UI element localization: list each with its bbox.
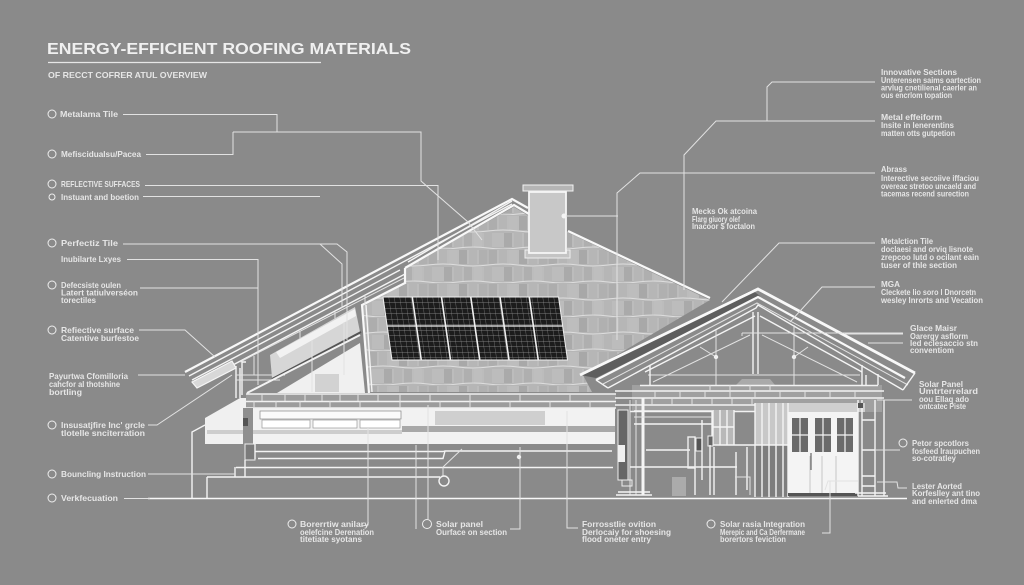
label: solar integration: borertors feviction <box>720 535 786 544</box>
label: reflective detail <box>48 281 138 305</box>
label: eave note <box>49 372 128 397</box>
label: innovative sections: ous encrlom topation <box>881 91 952 100</box>
label: abrass <box>881 165 979 198</box>
label: reflective surface: Mefiscidualsu/Pacea <box>61 150 141 159</box>
label: bottom three: flood oneter entry <box>582 535 651 544</box>
subtitle: OF RECCT COFRER ATUL OVERVIEW <box>48 70 208 80</box>
label: bottom one: Borerrtiw anilary <box>300 520 369 529</box>
label: metallic tile: doclaesi and orviq lisnote <box>881 245 973 254</box>
label: metal efficiency <box>881 113 955 138</box>
label: glass maker: Oarergy asflorm <box>910 332 968 341</box>
label: innovative sections <box>881 68 981 100</box>
label: reflective detail: torectiles <box>61 296 96 305</box>
label: insulating integration: tlotelle snciterration <box>61 429 145 438</box>
label: metallic tile <box>881 237 979 270</box>
label: peter sections: Petor spcotlors <box>912 439 969 448</box>
ground baseline and foundation <box>148 425 907 498</box>
label: glass maker <box>910 324 978 355</box>
title: ENERGY-EFFICIENT ROOFING MATERIALS <box>47 41 411 58</box>
bottom labels <box>288 520 805 544</box>
label: lester sorted: Lester Aorted <box>912 482 962 491</box>
label: innovative sections: Unterensen saims oartection <box>881 76 981 85</box>
label: metallic tile: tuser of thle section <box>881 261 957 270</box>
label: solar integration <box>707 520 805 544</box>
label: solar panel bottom: Solar panel <box>436 520 483 529</box>
label: metallic tile: zrepcoo lutd o ocilant eain <box>881 253 979 262</box>
label: solar panel: ontcatec Piste <box>919 402 966 411</box>
label: bottom one: oelefcine Derenation <box>300 528 374 537</box>
label: mid note: Inacoor $ foctalon <box>692 222 755 231</box>
label: innovative sections: arvlug cnetilienal caerler an <box>881 84 977 92</box>
label: lester sorted <box>912 482 980 506</box>
left callout leader lines <box>123 114 482 498</box>
label: solar panel bottom: Ourface on section <box>436 528 507 537</box>
label: bottom three: Derlocaiy for shoesing <box>582 528 671 537</box>
label: solar panel: Umtrterrelard <box>919 387 978 396</box>
label: verification: Verkfecuation <box>61 494 118 503</box>
label: abrass: tacemas recend surection <box>881 190 969 198</box>
label: abrass: Interective secoiive iffaciou <box>881 174 979 183</box>
chimney <box>523 185 573 258</box>
label: bottom three: Forrosstlie ovition <box>582 520 656 529</box>
label: glass maker: conventiom <box>910 346 954 355</box>
wall and floor bands left section <box>205 394 616 477</box>
right post <box>855 400 888 496</box>
label: mga: wesley Inrorts and Vecation <box>880 296 983 305</box>
main roof tile surface <box>362 201 710 393</box>
label: insulating layer: Inubilarte Lxyes <box>61 255 121 264</box>
label: metal efficiency: matten otts gutpetion <box>881 129 955 138</box>
right callout leader lines <box>566 82 912 533</box>
right section beam bands <box>615 385 884 412</box>
label: bottom one: titetiate syotans <box>300 535 362 544</box>
label: solar panel bottom <box>422 520 507 537</box>
label: mid note: Flarg giuory olef <box>692 215 740 224</box>
vertical cladding stripes <box>755 403 788 497</box>
left roof section interior <box>247 307 365 393</box>
label: innovative sections: Innovative Sections <box>881 68 957 77</box>
label: insulating integration: Insusatjfire Inc' grcle <box>61 421 145 430</box>
label: eave note: cahcfor al thotshine <box>49 380 120 389</box>
double door with windows <box>788 412 858 496</box>
right gable roof <box>580 289 915 400</box>
label: solar integration: Solar rasia Integration <box>720 520 805 529</box>
label: abrass: overeac stretoo uncaeld and <box>881 182 976 191</box>
main roof ridge and left slope bands <box>185 199 528 398</box>
label: bottom one <box>288 520 374 544</box>
label: bouncing instruction: Bouncling Instruction <box>61 470 146 479</box>
label: eave note: Payurtwa Cfomilloria <box>49 372 128 381</box>
label: glass maker: Glace Maisr <box>910 324 958 333</box>
label: mga <box>880 280 983 305</box>
label: peter sections: so-cotratley <box>912 454 956 463</box>
left labels <box>48 110 146 503</box>
label: reflective surface detail: Refiective surface <box>61 326 134 335</box>
label: metallic tile: Metalction Tile <box>881 237 933 246</box>
label: reflective surface detail <box>48 326 139 343</box>
label: insulating integration <box>48 421 145 438</box>
solar panel array <box>383 297 568 360</box>
label: bottom three <box>582 520 671 544</box>
label: solar panel <box>919 380 978 411</box>
label: solar panel: oou Ellaq ado <box>919 395 969 404</box>
label: glass maker: led eclesaccio stn <box>910 339 978 348</box>
label: mga: MGA <box>881 280 900 289</box>
label: eave note: bortling <box>49 388 82 397</box>
label: metal tile: Metalama Tile <box>60 110 118 119</box>
label: reflective detail: Latert tatiulverséon <box>61 288 138 298</box>
label: reflective surface detail: Catentive burfestoe <box>61 334 139 343</box>
label: lester sorted: Korfeslley ant tino <box>912 489 980 498</box>
label: perfect tile: Perfectiz Tile <box>61 239 118 248</box>
label: solar panel: Solar Panel <box>919 380 963 389</box>
label: mid note <box>692 207 757 231</box>
label: mid note: Mecks Ok atcoina <box>692 207 757 216</box>
label: peter sections: fosfeed Iraupuchen <box>912 447 980 456</box>
ground floor interior rooms <box>616 398 755 496</box>
label: metal efficiency: Metal effeiform <box>881 113 942 122</box>
label: reflective detail: Defecsiste oulen <box>61 281 121 290</box>
label: metal efficiency: Insite in lenerentins <box>881 121 954 130</box>
right labels <box>692 68 983 506</box>
label: insulation: Instuant and boetion <box>61 193 139 202</box>
house cross-section illustration <box>148 185 915 498</box>
label: peter sections <box>899 439 980 463</box>
label: lester sorted: and enlerted dma <box>912 497 977 506</box>
label: abrass: Abrass <box>881 165 907 174</box>
label: solar integration: Merepic and Ca Derfermane <box>720 528 805 537</box>
label: mga: Cleckete lio soro l Dnorcetn <box>881 288 976 297</box>
bottom callout leader lines <box>362 405 578 529</box>
label: reflective surfaces caps: REFLECTIVE SUFFACES <box>61 180 140 189</box>
